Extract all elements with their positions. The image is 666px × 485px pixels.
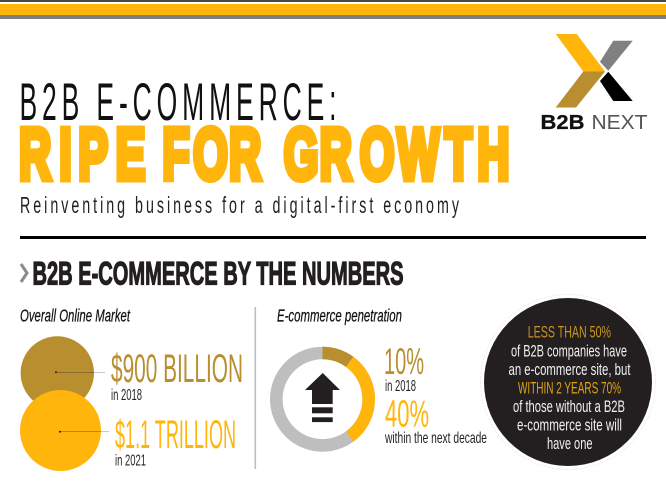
section heading — [21, 256, 404, 292]
panel heading: Overall Online Market — [20, 306, 131, 326]
logo: B2B Next: NEXT — [592, 112, 648, 134]
callout text: LESS THAN 50% — [528, 323, 611, 342]
callout text — [508, 323, 631, 453]
value: 10 percent: 10% — [384, 341, 424, 382]
logo: B2B Next — [540, 34, 648, 134]
circle: 2018 market — [21, 336, 94, 410]
heading rule — [20, 236, 646, 239]
callout: dark circle — [480, 294, 656, 470]
caption: in 2021: in 2021 — [115, 452, 146, 470]
donut chart — [276, 353, 369, 445]
circle: 2021 market — [20, 390, 101, 471]
panel: e-commerce penetration — [276, 306, 487, 447]
title line one: B2B E-COMMERCE: — [20, 72, 336, 131]
caption: in 2018: in 2018 — [385, 378, 416, 395]
caption: in 2018: in 2018 — [111, 387, 142, 404]
subtitle: Reinventing business for a digital-first economy — [20, 194, 459, 219]
logo: B2B Next: B2B — [540, 112, 584, 134]
value: 900 billion: $900 BILLION — [111, 347, 243, 391]
leader line 2021 — [59, 431, 109, 433]
panel: overall online market — [20, 306, 243, 471]
infographic canvas: $1.1 TRILLION — [115, 413, 236, 457]
panel heading: E-commerce penetration — [277, 306, 402, 326]
title line two: RIPE FOR GROWTH — [19, 114, 510, 195]
section heading: B2B E-COMMERCE BY THE NUMBERS — [32, 256, 404, 292]
caption: within the next decade: within the next decade — [384, 430, 487, 447]
panel divider — [254, 307, 256, 469]
leader line 2018 — [55, 371, 105, 373]
icon: up arrow — [305, 373, 340, 422]
top colour band — [0, 0, 666, 19]
callout text: have one — [547, 434, 592, 453]
value: 40 percent: 40% — [385, 394, 429, 436]
